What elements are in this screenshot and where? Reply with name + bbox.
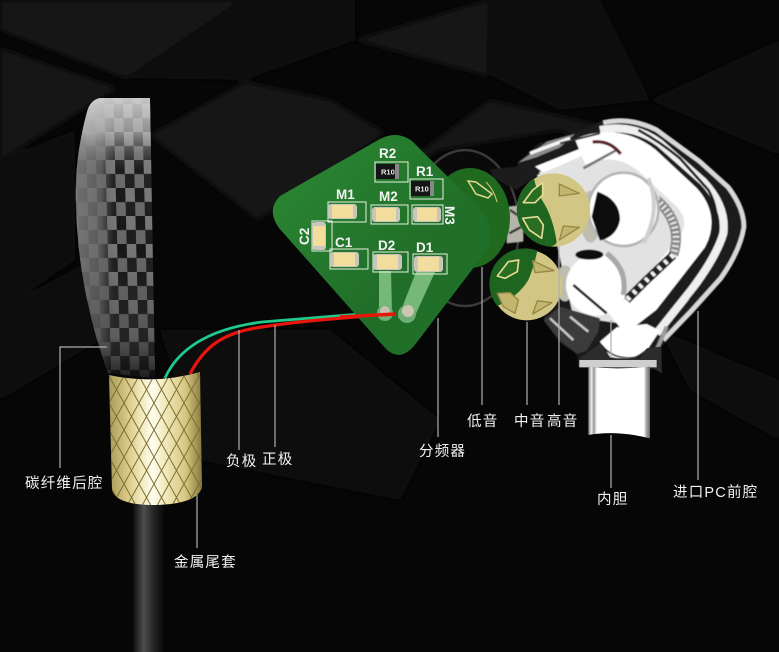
crossover circuit board bbox=[273, 135, 491, 355]
capacitor C2: C2 bbox=[297, 228, 312, 245]
capacitor C1: C1 bbox=[335, 235, 353, 250]
capacitor C2 bbox=[297, 221, 332, 251]
diode D2: D2 bbox=[378, 238, 395, 253]
capacitor M3: M3 bbox=[442, 206, 457, 225]
metal tail sleeve bbox=[109, 372, 202, 505]
capacitor C1 bbox=[330, 235, 368, 269]
capacitor M2: M2 bbox=[379, 189, 398, 204]
bass driver housing ring bbox=[411, 150, 519, 306]
label: carbon fibre back shell: 碳纤维后腔 bbox=[25, 475, 104, 492]
resistor R2: R2 bbox=[379, 146, 396, 161]
resistor R2 bbox=[375, 146, 408, 182]
inner tube nozzle bbox=[578, 343, 662, 438]
wire solder overlay bbox=[340, 314, 396, 317]
diode D2 bbox=[373, 238, 408, 272]
leader lines bbox=[60, 246, 698, 548]
capacitor M1 bbox=[328, 187, 366, 222]
label: positive: 正极 bbox=[262, 451, 293, 468]
lower nozzle opening bbox=[556, 250, 627, 316]
dark gap near drivers bbox=[490, 165, 540, 243]
fan reflection bbox=[657, 200, 676, 255]
capacitor M2 bbox=[371, 189, 408, 224]
inner light body bbox=[537, 147, 693, 323]
upper-left reflection stripes bbox=[518, 133, 621, 173]
upper nozzle opening bbox=[580, 173, 658, 246]
resistor R1: R1 bbox=[416, 164, 434, 179]
resistor R1 bbox=[410, 164, 443, 199]
label: crossover: 分频器 bbox=[419, 443, 466, 460]
traces bbox=[379, 271, 435, 318]
label: bass: 低音 bbox=[467, 413, 498, 430]
diode D1: D1 bbox=[416, 240, 434, 255]
lower mechanical detail bbox=[543, 307, 660, 361]
capacitor M3 bbox=[412, 205, 457, 225]
diode D1 bbox=[413, 240, 447, 274]
cable bbox=[133, 502, 164, 652]
resistor R2: R10 bbox=[381, 168, 395, 176]
bass driver bbox=[430, 168, 510, 268]
solder pads bbox=[377, 305, 416, 323]
mid driver bbox=[489, 248, 562, 320]
capacitor M1: M1 bbox=[336, 187, 355, 202]
label: imported PC front cavity: 进口PC前腔 bbox=[673, 484, 758, 501]
label: inner tube: 内胆 bbox=[597, 491, 628, 508]
carbon fibre back shell bbox=[76, 98, 155, 378]
label: negative: 负极 bbox=[226, 453, 257, 470]
wires bbox=[165, 314, 396, 378]
label: metal tail sleeve: 金属尾套 bbox=[174, 554, 237, 571]
label: high: 高音 bbox=[547, 413, 578, 430]
high driver bbox=[517, 173, 590, 247]
label: mid: 中音 bbox=[514, 413, 545, 430]
resistor R1: R10 bbox=[415, 184, 429, 194]
chrome front cavity bbox=[490, 118, 747, 370]
